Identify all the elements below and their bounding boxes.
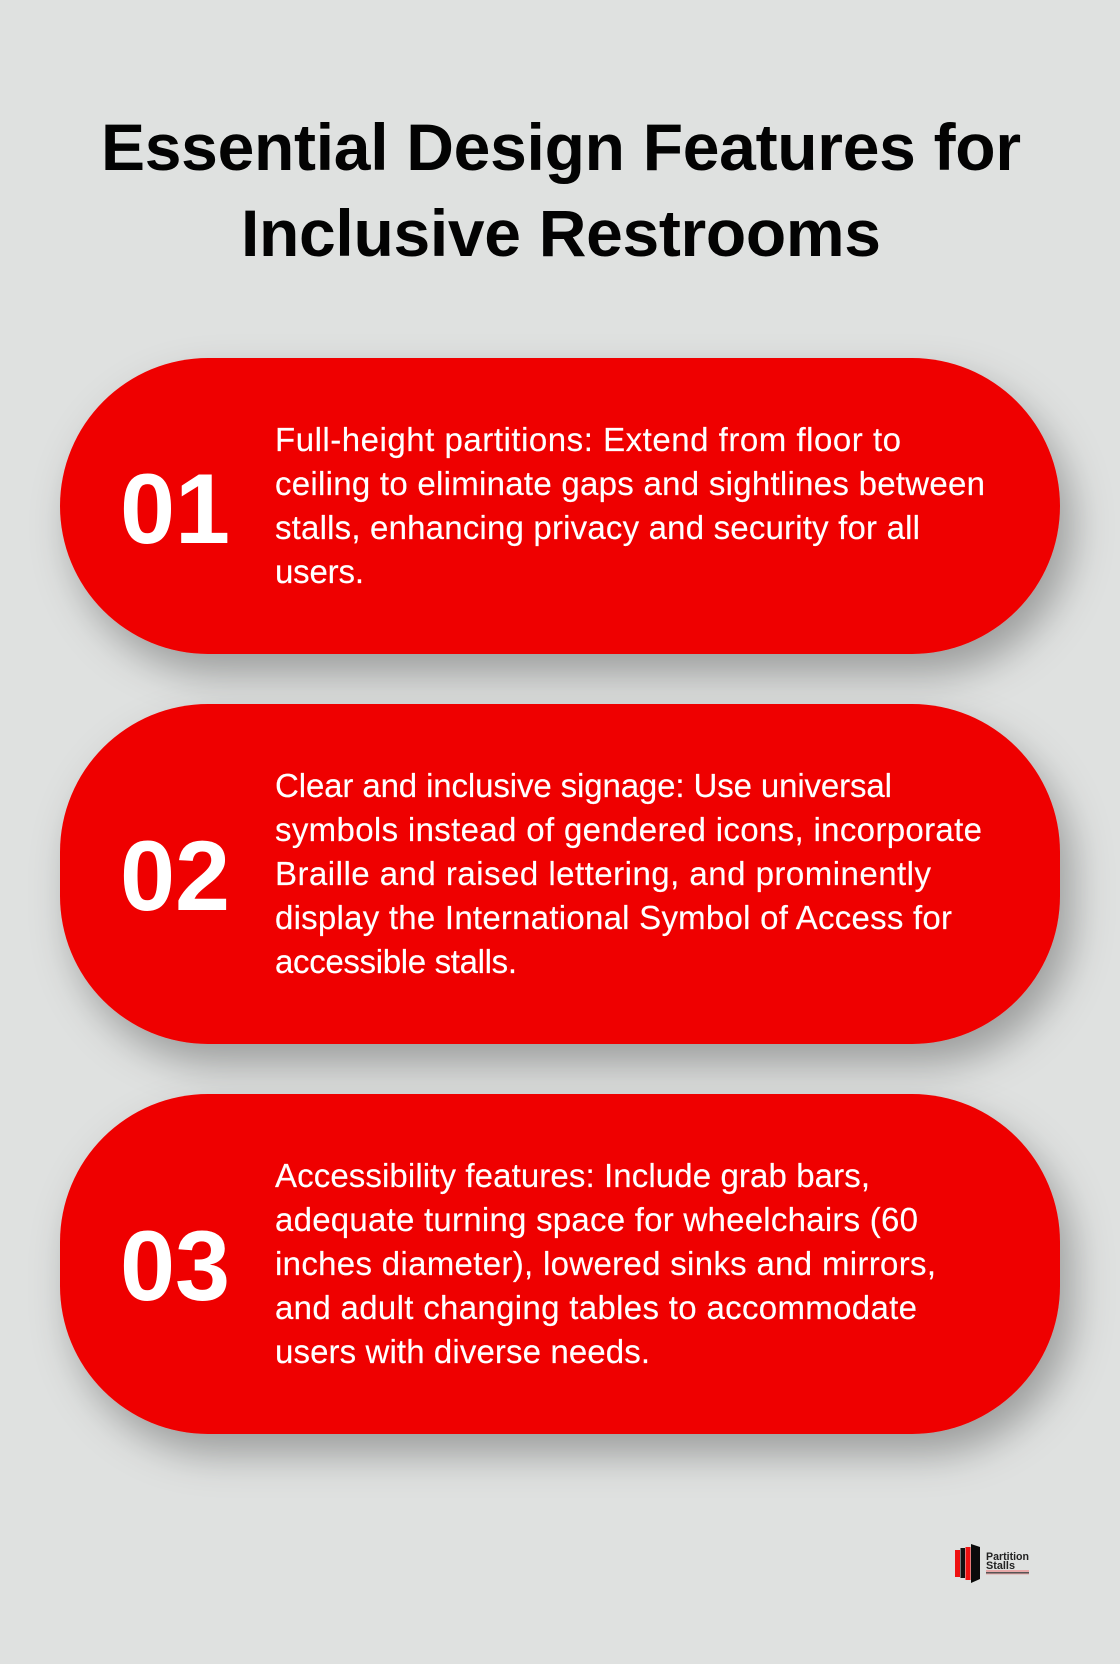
logo: Partition Stalls	[955, 1544, 1029, 1583]
text: accessibility features: adequate turning space for wheelchairs (60	[275, 1201, 918, 1238]
text: full-height partitions	[275, 421, 985, 590]
text: clear and inclusive signage: symbols instead of gendered icons, incorporate	[275, 811, 982, 848]
logo wordmark: Stalls	[986, 1560, 1015, 1572]
panel: feature 02	[60, 704, 1060, 1044]
title	[101, 110, 1021, 270]
text: accessibility features: users with diverse needs.	[275, 1333, 650, 1370]
text: full-height partitions: stalls, enhancing privacy and security for all	[275, 509, 920, 546]
text: accessibility features: and adult changing tables to accommodate	[275, 1289, 917, 1326]
text: clear and inclusive signage: accessible stalls.	[275, 943, 517, 980]
text: full-height partitions: users.	[275, 553, 364, 590]
title: Essential Design Features for	[101, 110, 1021, 184]
logo wordmark	[986, 1551, 1029, 1574]
title: Inclusive Restrooms	[241, 196, 881, 270]
number 03: 03	[120, 1210, 230, 1321]
text: clear and inclusive signage: Braille and raised lettering, and prominently	[275, 855, 932, 892]
text: accessibility features: inches diameter), lowered sinks and mirrors,	[275, 1245, 936, 1282]
text: clear and inclusive signage: display the International Symbol of Access for	[275, 899, 952, 936]
text: accessibility features	[275, 1157, 936, 1370]
text: clear and inclusive signage: Clear and inclusive signage: Use universal	[275, 767, 892, 804]
card background 01	[60, 358, 1060, 654]
number 01: 01	[120, 453, 230, 564]
panel: feature 01	[60, 358, 1060, 654]
logo wordmark: Partition	[986, 1551, 1029, 1563]
number 02: 02	[120, 820, 230, 931]
text: clear and inclusive signage	[275, 767, 982, 980]
text: full-height partitions: Full-height partitions: Extend from floor to	[275, 421, 901, 458]
card background 02	[60, 704, 1060, 1044]
card background 03	[60, 1094, 1060, 1434]
text: accessibility features: Accessibility features: Include grab bars,	[275, 1157, 870, 1194]
icon: partition panels	[955, 1544, 980, 1583]
panel: feature 03	[60, 1094, 1060, 1434]
text: full-height partitions: ceiling to eliminate gaps and sightlines between	[275, 465, 985, 502]
